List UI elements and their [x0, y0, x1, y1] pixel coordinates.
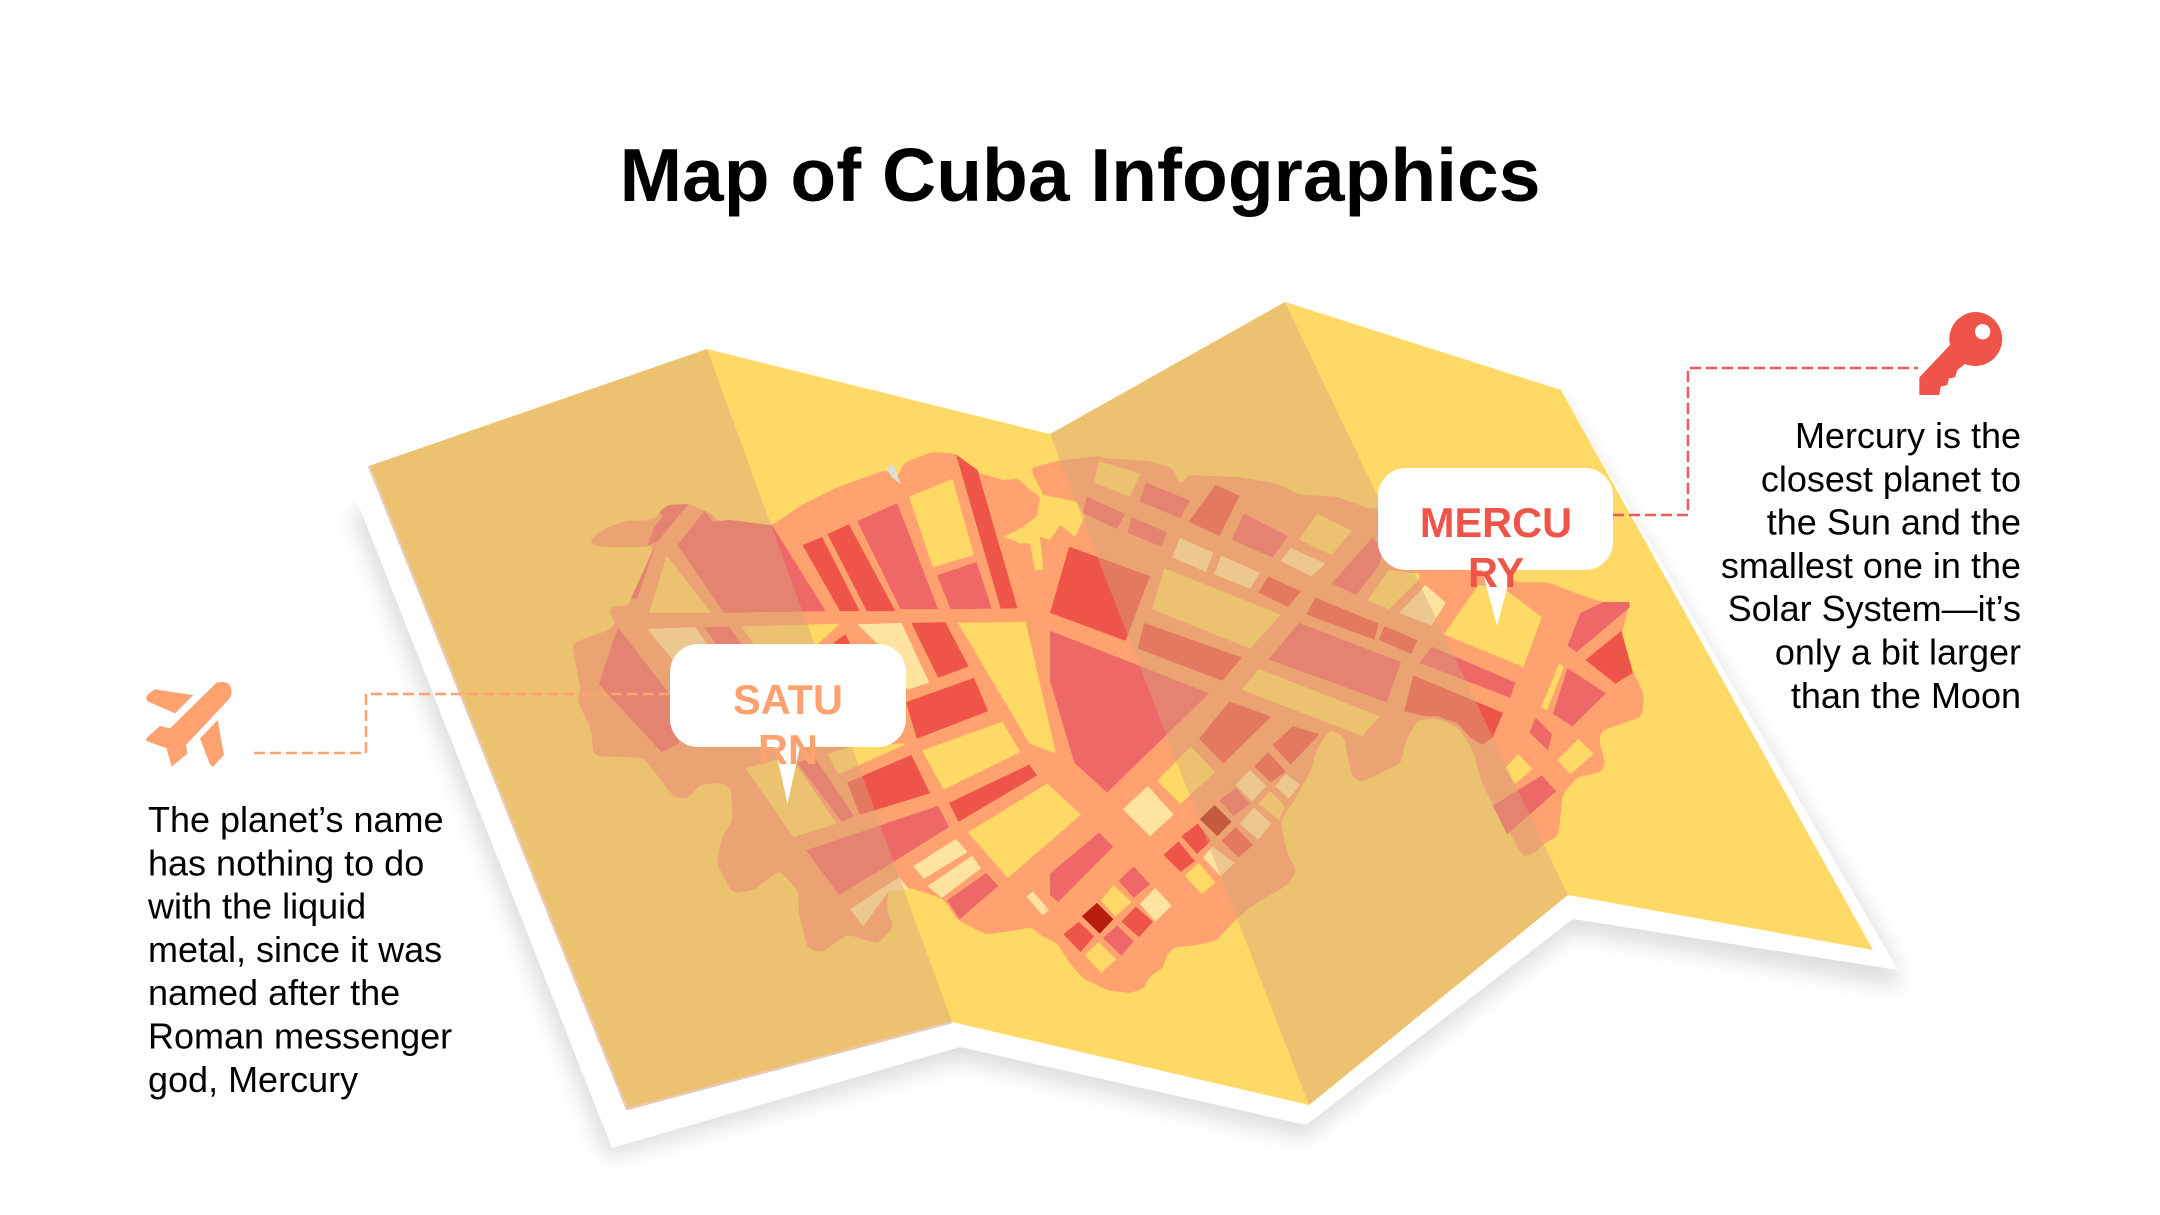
text block: right description: Solar System—it’s	[1728, 588, 2021, 629]
text block: left description: with the liquid	[147, 886, 366, 927]
callout: Saturn label: SATU	[733, 676, 843, 723]
city blocks, west half	[599, 455, 1081, 926]
text block: right description: smallest one in the	[1721, 545, 2021, 586]
text block: right description: closest planet to	[1761, 458, 2021, 499]
callout: Mercury label: MERCU	[1420, 499, 1572, 546]
text block: left description: Roman messenger	[148, 1016, 452, 1056]
callout: Mercury label: RY	[1468, 549, 1524, 596]
fold shade: east panel	[1050, 302, 1568, 1105]
callout: Saturn label	[670, 644, 906, 804]
folded map	[344, 295, 1902, 1158]
icon: plane	[146, 682, 232, 767]
text block: left description: god, Mercury	[148, 1059, 358, 1100]
callout: Saturn label: RN	[758, 726, 818, 773]
city blocks, east half	[1050, 461, 1633, 973]
paper shadow	[350, 400, 1902, 1158]
west panel pink edge	[369, 466, 952, 1109]
title: Map of Cuba Infographics	[620, 133, 1540, 217]
text block: right description: Mercury is the	[1795, 415, 2021, 456]
callout: Mercury label	[1378, 468, 1613, 626]
icon: key	[1919, 312, 2002, 395]
text block: left description: The planet’s name	[148, 799, 444, 840]
text block: right description: the Sun and the	[1767, 502, 2021, 543]
text block: right description: only a bit larger	[1775, 632, 2021, 672]
island land	[572, 452, 1644, 993]
text block: left description: metal, since it was	[148, 929, 442, 970]
paper yellow sheet	[369, 302, 1873, 1109]
connector: Saturn to plane icon	[253, 694, 670, 753]
paper white backing	[344, 295, 1898, 1148]
connector: Mercury to key icon	[1613, 368, 1918, 515]
text block: right description: than the Moon	[1791, 675, 2021, 716]
text block: left description: has nothing to do	[148, 842, 424, 883]
fold shade: west panel	[369, 349, 952, 1109]
bay and channel	[960, 435, 1085, 570]
text block: left description: named after the	[148, 972, 400, 1013]
